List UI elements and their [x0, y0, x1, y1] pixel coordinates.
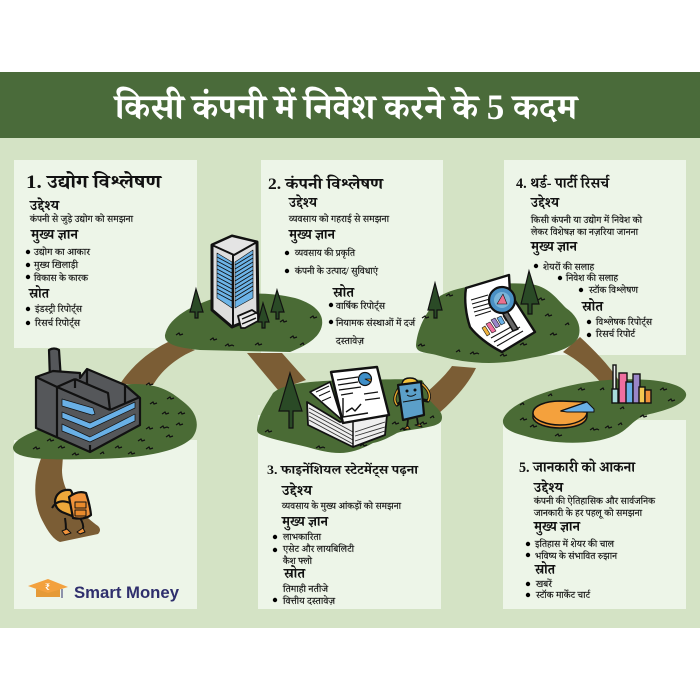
purpose: उद्देश्य — [533, 479, 565, 496]
key knowledge — [530, 240, 639, 296]
sources — [26, 285, 83, 329]
purpose: उद्देश्य — [29, 197, 61, 214]
sources: स्रोत — [581, 298, 604, 315]
heading: 1. उद्योग विश्लेषण — [26, 171, 163, 193]
key knowledge: व्यवसाय की प्रकृति — [294, 247, 356, 259]
icon: graduation cap — [28, 579, 68, 598]
heading: 4. थर्ड- पार्टी रिसर्च — [516, 174, 611, 192]
key knowledge: उद्योग का आकार — [33, 246, 90, 258]
key knowledge — [26, 228, 90, 284]
sources: नियामक संस्थाओं में दर्ज — [335, 317, 416, 329]
page background — [0, 138, 700, 628]
panel 1: industry analysis — [26, 171, 163, 329]
purpose: कंपनी से जुड़े उद्योग को समझना — [29, 213, 134, 225]
sources: विश्लेषक रिपोर्ट्स — [595, 316, 653, 328]
sources: रिसर्च रिपोर्ट — [595, 328, 636, 340]
panel 3: reading financial statements — [267, 462, 420, 607]
key knowledge: एसेट और लायबिलिटी — [282, 543, 355, 555]
purpose: किसी कंपनी या उद्योग में निवेश को — [530, 214, 643, 226]
wordmark: Smart Money — [74, 583, 180, 602]
icon: factory — [36, 348, 140, 452]
icon: office building — [212, 236, 258, 328]
panel 4: third-party research — [516, 174, 653, 340]
island: pie and bars — [503, 379, 686, 443]
panel 2: company analysis — [268, 174, 416, 347]
icon: calculator character — [395, 378, 429, 429]
purpose: व्यवसाय को गहराई से समझना — [288, 213, 390, 225]
key knowledge: स्टॉक विश्लेषण — [588, 284, 639, 296]
heading: 5. जानकारी को आकना — [519, 458, 636, 476]
purpose — [281, 482, 402, 512]
purpose: लेकर विशेषज्ञ का नज़रिया जानना — [530, 226, 639, 238]
panel 5: evaluating information — [519, 458, 656, 601]
key knowledge: मुख्य ज्ञान — [281, 515, 329, 531]
title: किसी कंपनी में निवेश करने के 5 कदम — [112, 86, 580, 127]
grass tufts — [33, 383, 185, 455]
icon: financial statements stack — [307, 367, 389, 447]
winding path — [35, 337, 620, 542]
sources: तिमाही नतीजे — [282, 583, 329, 595]
key knowledge: इतिहास में शेयर की चाल — [534, 538, 615, 550]
sources: खबरें — [535, 578, 552, 590]
panel backgrounds — [14, 160, 686, 609]
title banner — [0, 72, 700, 138]
sources: वित्तीय दस्तावेज़ — [282, 595, 336, 607]
sources: स्रोत — [283, 565, 306, 582]
purpose: व्यवसाय के मुख्य आंकड़ों को समझना — [281, 500, 402, 512]
key knowledge: मुख्य खिलाड़ी — [33, 259, 79, 271]
purpose: उद्देश्य — [530, 194, 561, 211]
heading: 3. फाइनेंशियल स्टेटमेंट्स पढ़ना — [267, 462, 420, 479]
key knowledge: कैश फ्लो — [282, 555, 313, 567]
purpose — [530, 194, 643, 238]
icon: research paper with magnifier — [465, 275, 535, 352]
sources: स्टॉक मार्केट चार्ट — [535, 589, 591, 601]
island: research paper — [416, 283, 580, 363]
purpose: उद्देश्य — [288, 194, 319, 211]
island: factory — [13, 384, 197, 459]
sources: स्रोत — [534, 561, 556, 578]
key knowledge — [285, 228, 379, 277]
sources — [526, 561, 591, 601]
sources — [273, 565, 336, 607]
sources — [329, 284, 416, 347]
sources: स्रोत — [28, 285, 50, 302]
key knowledge: शेयरों की सलाह — [543, 261, 595, 273]
sources: रिसर्च रिपोर्ट्स — [34, 317, 81, 329]
key knowledge: मुख्य ज्ञान — [288, 228, 336, 244]
island: building — [165, 294, 322, 352]
key knowledge: मुख्य ज्ञान — [30, 228, 79, 244]
key knowledge: लाभकारिता — [282, 531, 322, 543]
purpose — [533, 479, 656, 519]
purpose: कंपनी की ऐतिहासिक और सार्वजनिक — [533, 495, 656, 507]
key knowledge: निवेश की सलाह — [565, 272, 619, 284]
key knowledge: भविष्य के संभावित रुझान — [535, 550, 618, 562]
island: documents — [257, 379, 442, 453]
key knowledge: मुख्य ज्ञान — [533, 520, 581, 536]
icon: bar charts — [612, 365, 651, 403]
key knowledge: कंपनी के उत्पाद/ सुविधाएं — [294, 265, 379, 277]
sources — [581, 298, 653, 340]
icon: hiker backpack — [52, 490, 91, 535]
key knowledge: विकास के कारक — [33, 272, 89, 284]
icon: graduation cap: ₹ — [45, 582, 50, 592]
key knowledge — [526, 520, 618, 562]
heading: 2. कंपनी विश्लेषण — [268, 174, 384, 193]
key knowledge: मुख्य ज्ञान — [530, 240, 578, 256]
icon: pie chart — [533, 401, 594, 428]
purpose: उद्देश्य — [281, 482, 314, 499]
purpose — [29, 197, 134, 225]
trees — [190, 271, 539, 428]
sources: दस्तावेज़ — [335, 335, 365, 347]
purpose — [288, 194, 390, 225]
sources: स्रोत — [332, 284, 355, 301]
sources: इंडस्ट्री रिपोर्ट्स — [34, 303, 83, 315]
logo: Smart Money — [28, 579, 180, 602]
purpose: जानकारी के हर पहलू को समझना — [533, 507, 643, 519]
key knowledge — [273, 515, 355, 567]
sources: वार्षिक रिपोर्ट्स — [335, 300, 386, 312]
